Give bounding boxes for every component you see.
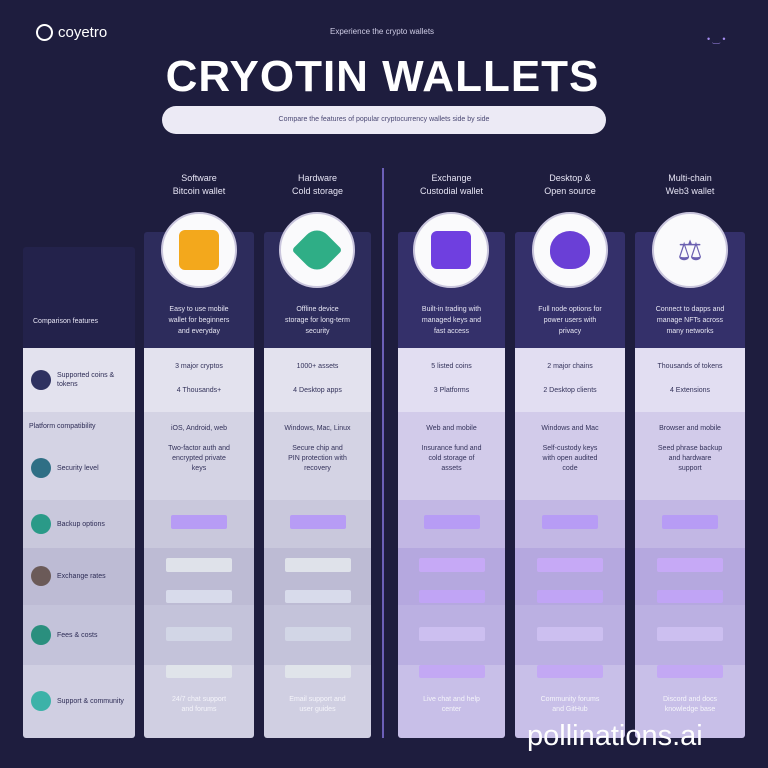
icon: smile: • ‿ • (707, 34, 726, 44)
logo (36, 24, 107, 41)
column 1: 4 Thousands+ (177, 387, 221, 394)
column 1: and forums (181, 706, 217, 713)
label column: Platform compatibility (29, 423, 96, 430)
column 3: Exchange (431, 173, 472, 183)
column 5: Discord and docs (663, 696, 717, 703)
column 2 (264, 173, 371, 738)
column 2: 4 Desktop apps (293, 387, 342, 394)
column 4: Self-custody keys (543, 445, 597, 452)
column 2: Windows, Mac, Linux (284, 425, 351, 432)
column 1: Easy to use mobile (169, 306, 229, 313)
column 3: center (442, 706, 461, 713)
column 5: Browser and mobile (659, 425, 721, 432)
column 4: Desktop & (549, 173, 591, 183)
label column: Support & community (57, 698, 124, 704)
column 3: 3 Platforms (434, 387, 469, 394)
column 3: fast access (434, 328, 469, 335)
column 3: Live chat and help (423, 696, 480, 703)
column 2: security (305, 328, 330, 335)
label column: Comparison features (33, 318, 98, 325)
column 2: Email support and (289, 696, 346, 703)
column 5: many networks (666, 328, 714, 335)
column 1: keys (192, 465, 206, 472)
logo: coyetro (58, 24, 107, 41)
column 2: recovery (304, 465, 331, 472)
column 5: support (678, 465, 702, 472)
column 5: Multi-chain (668, 173, 712, 183)
column 2: user guides (299, 706, 336, 713)
label column: Exchange rates (57, 572, 106, 580)
title: CRYOTIN WALLETS (166, 52, 599, 101)
column 2: Secure chip and (292, 445, 343, 452)
column 2: PIN protection with (288, 455, 347, 462)
column 1: wallet for beginners (169, 317, 229, 324)
column 5: Seed phrase backup (658, 445, 722, 452)
column 2: storage for long-term (285, 317, 350, 324)
column 5: 4 Extensions (670, 387, 710, 394)
column 5: knowledge base (665, 706, 715, 713)
column 1: Software (181, 173, 217, 183)
column 2: Cold storage (292, 186, 343, 196)
column 3: assets (441, 465, 462, 472)
column 4: 2 Desktop clients (543, 387, 597, 394)
subtitle pill: Compare the features of popular cryptocurrency wallets side by side (279, 116, 489, 123)
column 5 (635, 173, 745, 738)
label column: Fees & costs (57, 632, 97, 638)
column 3 (398, 173, 505, 738)
column 3: 5 listed coins (431, 363, 472, 370)
column 5: Connect to dapps and (656, 306, 724, 313)
label column: Supported coins & tokens (57, 372, 114, 388)
column 4: privacy (559, 328, 581, 335)
column 4: Open source (544, 186, 596, 196)
watermark: pollinations.ai (527, 720, 703, 752)
column 5: Web3 wallet (666, 186, 714, 196)
icon: book: ⚖ (677, 234, 703, 266)
column 4: 2 major chains (547, 363, 593, 370)
column 4: Windows and Mac (541, 425, 599, 432)
column 5: Thousands of tokens (658, 363, 722, 370)
icon: green leaf (279, 212, 355, 288)
top subtitle: Experience the crypto wallets (330, 27, 434, 36)
column 2: Hardware (298, 173, 337, 183)
column 5: manage NFTs across (657, 317, 723, 324)
column 3: Web and mobile (426, 425, 477, 432)
icon: orange wallet (161, 212, 237, 288)
column 3: Insurance fund and (422, 445, 481, 452)
label column: Backup options (57, 520, 105, 528)
column 2: Offline device (296, 306, 339, 313)
column 1: 24/7 chat support (172, 696, 226, 703)
column 2: 1000+ assets (297, 363, 338, 370)
icon: purple brain (532, 212, 608, 288)
icon: book (652, 212, 728, 288)
column 4: and GitHub (552, 706, 588, 713)
column 4: power users with (544, 317, 596, 324)
column 4: Full node options for (538, 306, 602, 313)
column 4: code (562, 465, 578, 472)
divider (382, 168, 384, 738)
column 1: Two-factor auth and (168, 445, 230, 452)
subtitle pill (162, 106, 606, 134)
column 3: managed keys and (422, 317, 481, 324)
icon: purple wallet (413, 212, 489, 288)
column 1: 3 major cryptos (175, 363, 223, 370)
column 5: and hardware (669, 455, 711, 462)
label column (23, 247, 135, 738)
column 1: and everyday (178, 328, 220, 335)
column 3: Custodial wallet (420, 186, 483, 196)
column 1 (144, 173, 254, 738)
column 4: with open audited (543, 455, 597, 462)
column 4: Community forums (541, 696, 599, 703)
column 1: Bitcoin wallet (173, 186, 225, 196)
column 3: Built-in trading with (422, 306, 481, 313)
label column: Security level (57, 464, 99, 472)
column 1: iOS, Android, web (171, 425, 227, 432)
column 4 (515, 173, 625, 738)
column 1: encrypted private (172, 455, 226, 462)
column 3: cold storage of (429, 455, 474, 462)
